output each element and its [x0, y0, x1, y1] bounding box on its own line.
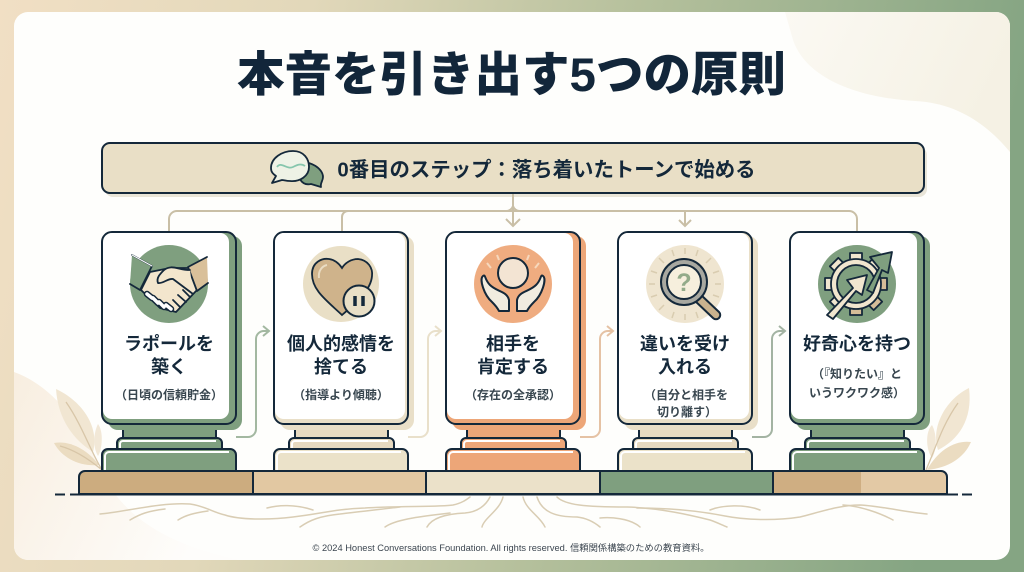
icon: hands holding person	[474, 245, 552, 323]
pillar 1: rapport	[102, 232, 242, 471]
pillar 1: rapport: 築く	[151, 356, 187, 377]
arrow: card 3 to card 4	[580, 326, 613, 437]
pillar 2: set aside personal feelings: 捨てる	[314, 357, 368, 377]
pillar 4: accept differences: 入れる	[658, 357, 712, 377]
card title: 相手を	[486, 334, 540, 354]
card subtitle: （指導より傾聴）	[293, 387, 389, 402]
decorative leaves right	[926, 388, 971, 470]
pillar 4: accept differences	[618, 232, 758, 471]
card subtitle: （日頃の信頼貯金）	[115, 387, 223, 402]
icon: magnifier with question mark: ?	[676, 269, 692, 297]
card body	[452, 236, 586, 430]
card subtitle: （存在の全承認）	[465, 387, 561, 402]
card title: 個人的感情を	[287, 333, 395, 354]
pedestal	[618, 420, 752, 471]
card body	[108, 236, 242, 430]
pedestal	[446, 420, 580, 471]
card subtitle: （自分と相手を	[644, 387, 728, 402]
connectors from banner to cards	[169, 194, 857, 231]
pillar 5: be curious: いうワクワク感）	[809, 385, 905, 400]
footer: © 2024 Honest Conversations Foundation. All rights reserved. 信頼関係構築のための教育資料。	[313, 542, 709, 553]
arrow: card 2 to card 3	[408, 326, 441, 437]
decorative leaves left	[54, 389, 102, 470]
icon: gear with arrows	[818, 245, 896, 323]
banner: step zero	[102, 143, 927, 197]
pillar 3: affirm the other: 肯定する	[477, 357, 549, 377]
card title: ラポールを	[124, 333, 214, 354]
arrow: card 4 to card 5	[752, 326, 785, 437]
card body	[280, 236, 414, 430]
card subtitle: （『知りたい』と	[812, 366, 902, 381]
pillar 4: accept differences: 切り離す）	[657, 404, 717, 419]
pillar 3: affirm the other	[446, 232, 586, 471]
ground line	[55, 494, 972, 496]
roots	[100, 497, 927, 527]
title: 本音を引き出す5つの原則	[237, 49, 786, 102]
icon: handshake	[130, 245, 208, 323]
pillar 5: be curious	[790, 232, 930, 471]
pillar 2: set aside personal feelings	[274, 232, 414, 471]
pedestal	[102, 420, 236, 471]
card title: 違いを受け	[640, 333, 730, 354]
card title: 好奇心を持つ	[803, 334, 911, 354]
icon: heart with pause	[303, 246, 379, 322]
icon: speech bubbles	[271, 151, 323, 187]
base slab	[79, 471, 947, 494]
pedestal	[274, 420, 408, 471]
arrow: card 1 to card 2	[236, 326, 269, 437]
card body	[796, 236, 930, 430]
banner text: 0番目のステップ：落ち着いたトーンで始める	[337, 158, 756, 182]
pedestal	[790, 420, 924, 471]
icon: magnifier with question mark	[646, 245, 724, 323]
card body	[624, 236, 758, 430]
